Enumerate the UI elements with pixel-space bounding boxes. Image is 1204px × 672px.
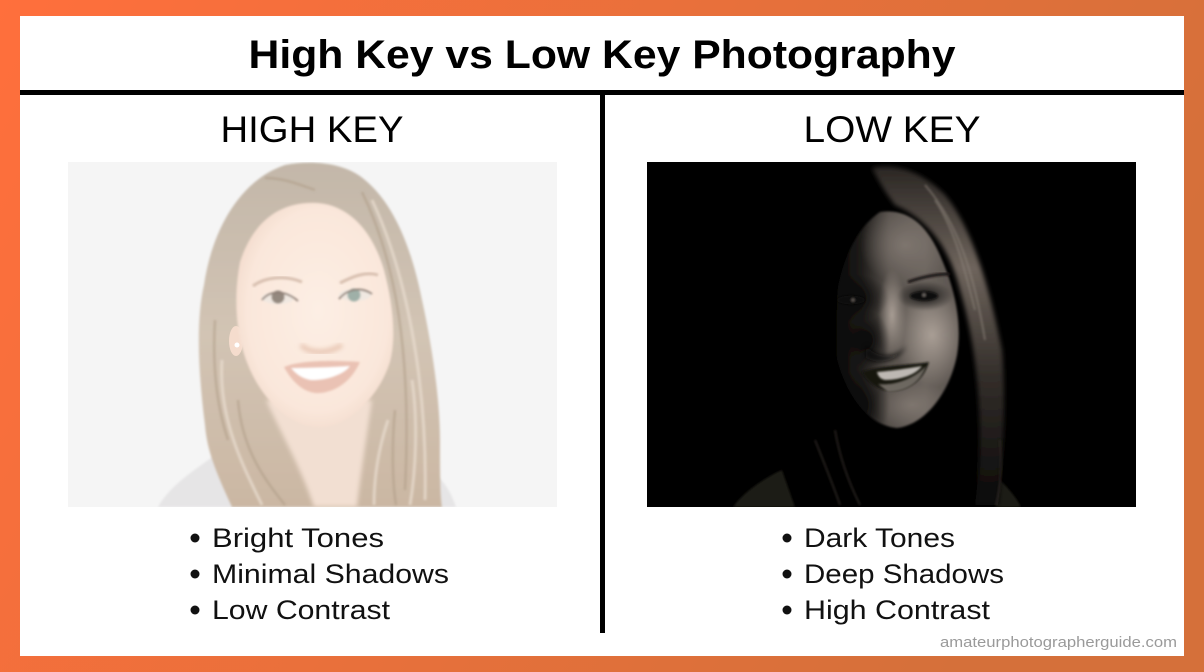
hair bbox=[199, 163, 442, 507]
column divider bbox=[600, 95, 605, 633]
heading: high key: HIGH KEY bbox=[220, 109, 404, 150]
bullet item: deep shadows: Deep Shadows bbox=[804, 559, 1004, 589]
ear bbox=[229, 326, 243, 356]
watermark: amateurphotographerguide.com bbox=[940, 634, 1177, 651]
face bbox=[836, 210, 960, 430]
teeth bbox=[877, 366, 922, 380]
nose shadow bbox=[866, 345, 906, 362]
eyes bbox=[262, 288, 372, 304]
list: low key bbox=[782, 523, 1004, 625]
bullet item: minimal shadows: Minimal Shadows bbox=[212, 559, 449, 589]
mouth bbox=[862, 362, 929, 391]
bullet item: low contrast: Low Contrast bbox=[212, 595, 391, 625]
lower lip bbox=[878, 366, 926, 392]
shirt bbox=[733, 470, 1021, 507]
bullet item: high contrast: High Contrast bbox=[804, 595, 991, 625]
lips bbox=[284, 361, 360, 393]
list: high key bbox=[190, 523, 449, 625]
title: High Key vs Low Key Photography bbox=[248, 33, 956, 77]
title divider bbox=[20, 90, 1184, 95]
brows bbox=[253, 278, 302, 286]
neck bbox=[266, 400, 372, 507]
shirt bbox=[158, 455, 456, 507]
bullet item: bright tones: Bright Tones bbox=[212, 523, 384, 553]
photo: low key portrait bbox=[647, 162, 1136, 507]
bullet item: dark tones: Dark Tones bbox=[804, 523, 955, 553]
eyes bbox=[850, 290, 939, 304]
brows bbox=[908, 274, 950, 282]
heading: low key: LOW KEY bbox=[804, 109, 980, 150]
photo: high key portrait bbox=[68, 162, 557, 507]
nose bbox=[301, 345, 342, 352]
face bbox=[236, 203, 393, 427]
lit hair bbox=[872, 167, 1004, 505]
teeth bbox=[291, 366, 350, 380]
